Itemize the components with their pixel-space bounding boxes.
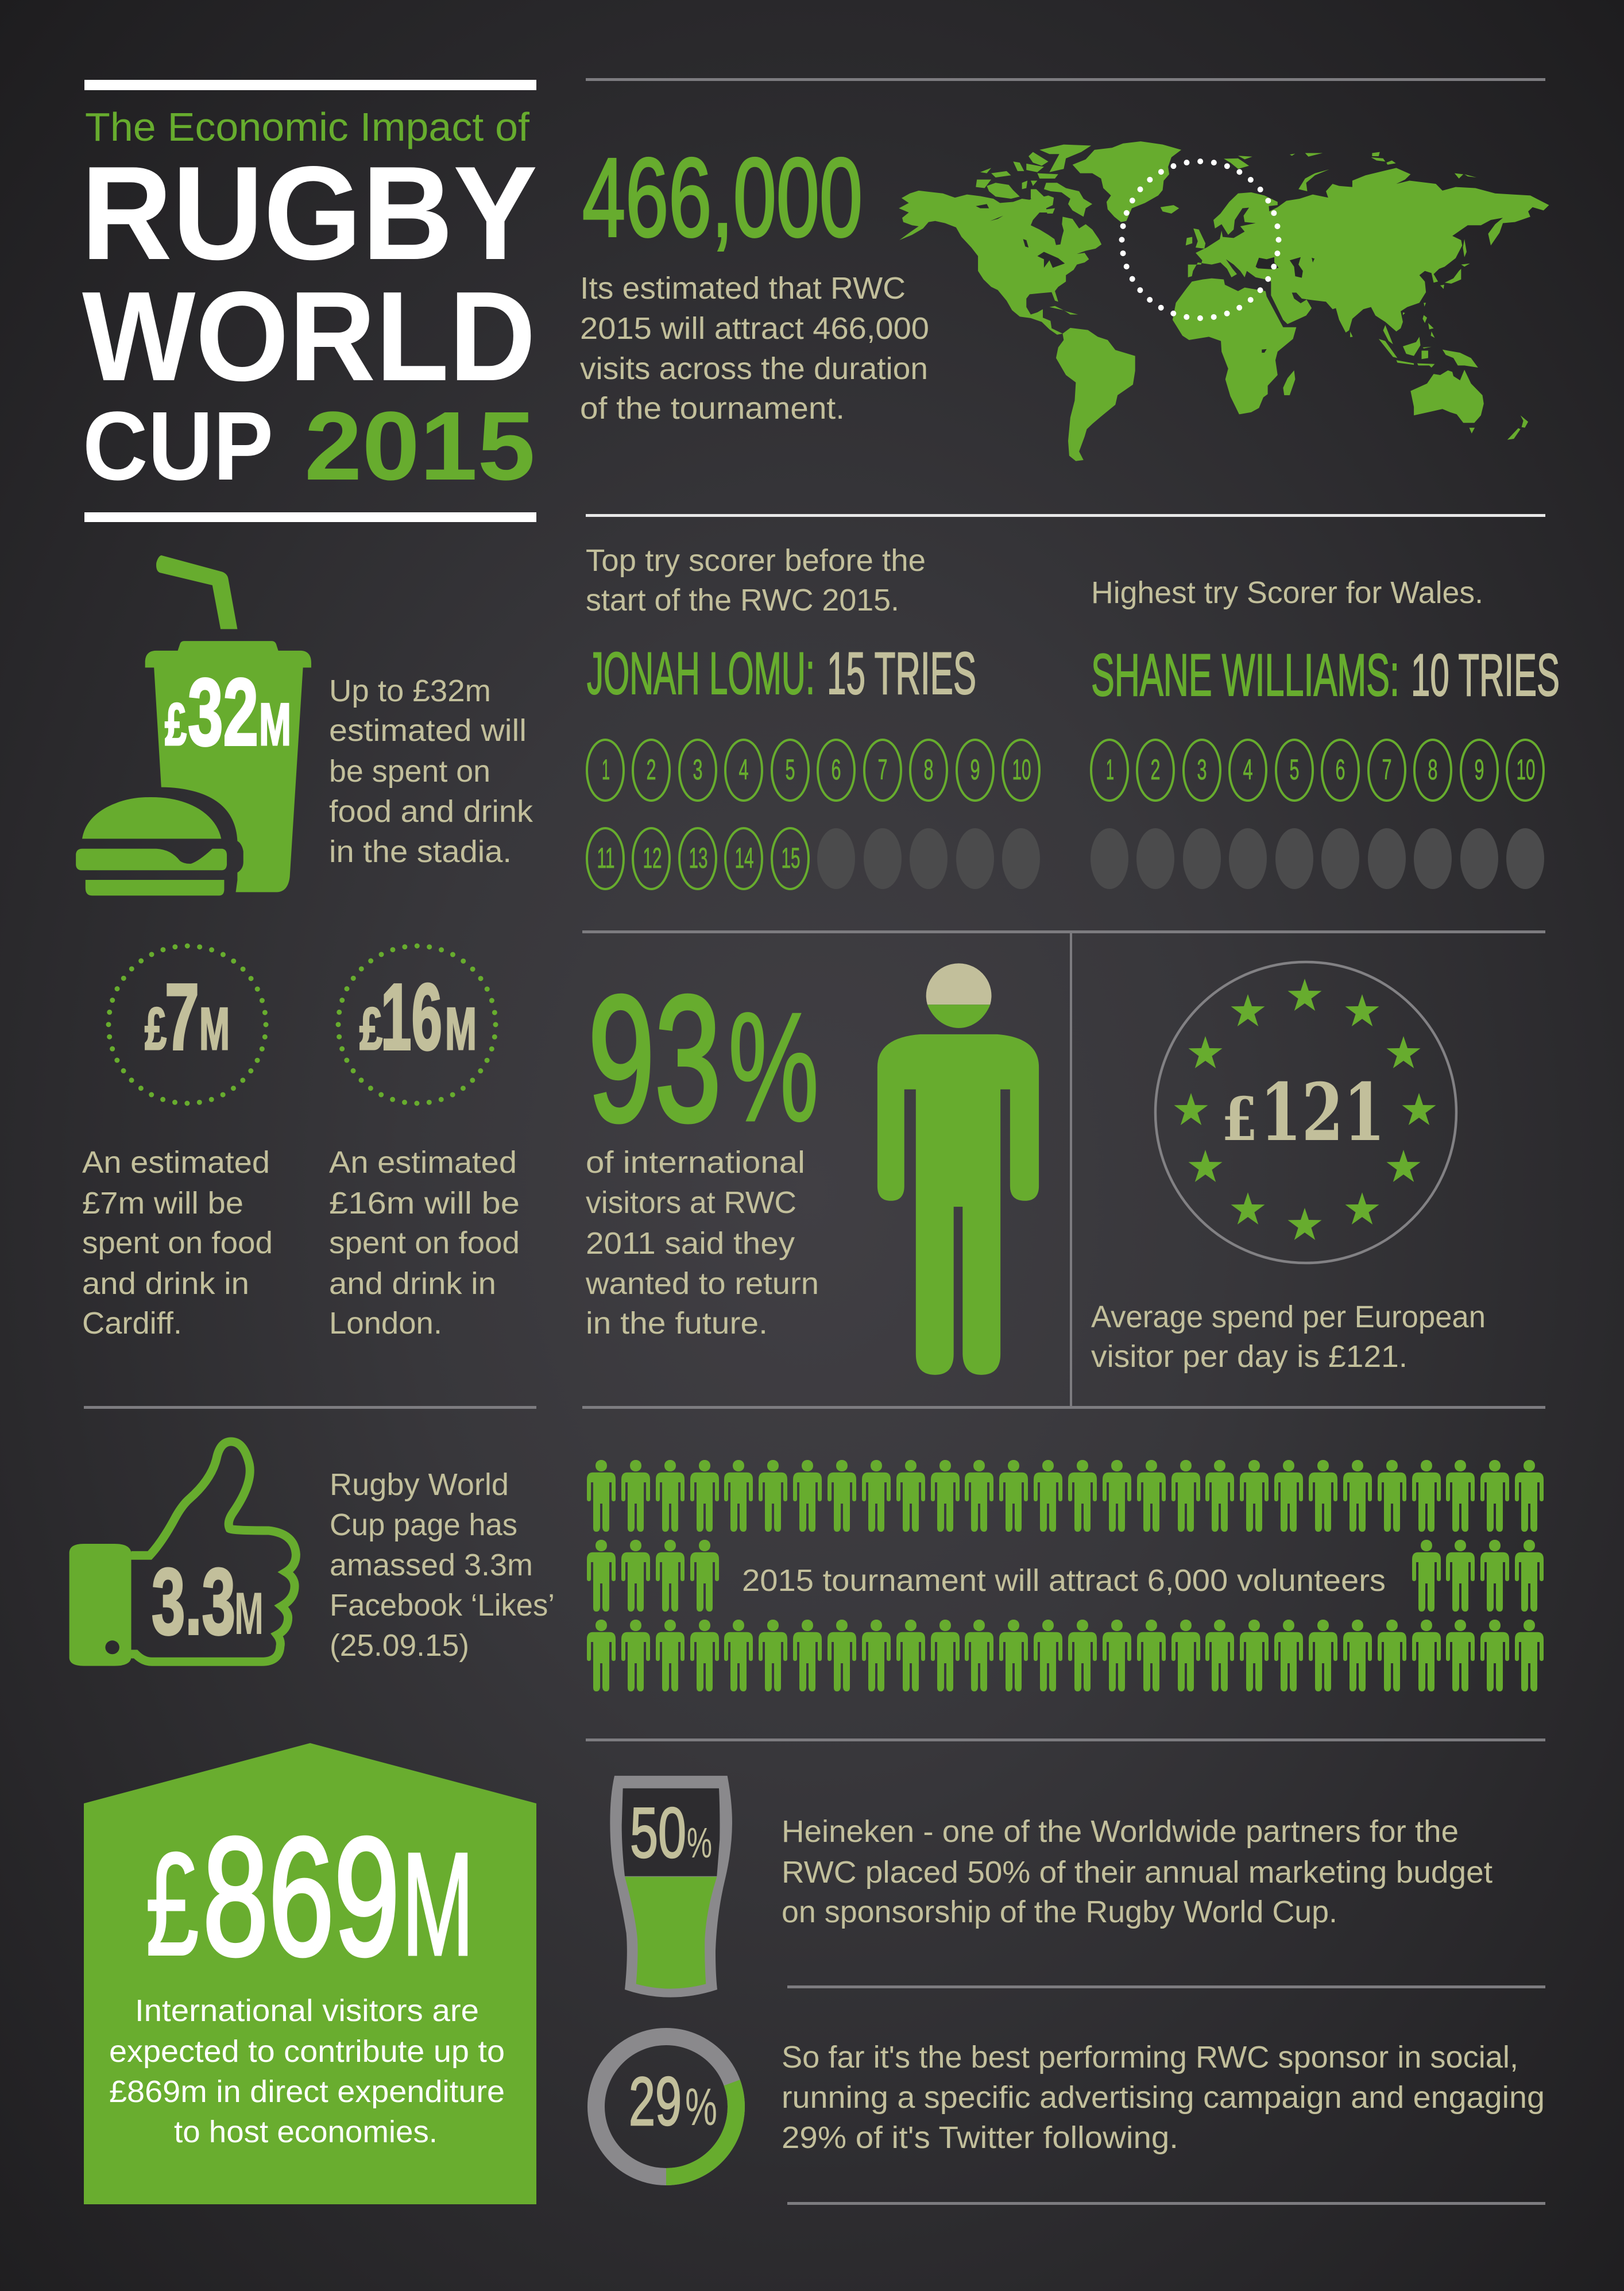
tries ovals: 8	[923, 754, 934, 786]
title: CUP: CUP	[83, 392, 273, 501]
Williams tries ovals: 7	[1382, 754, 1392, 786]
tries ovals: 5	[786, 754, 795, 786]
visits description: Its estimated that RWC	[580, 271, 906, 306]
visits description: of the tournament.	[580, 391, 845, 426]
people row 1	[587, 1460, 1544, 1532]
Williams tries ovals: 8	[1428, 754, 1438, 786]
European spend description	[1091, 1300, 1486, 1374]
house shape	[84, 1743, 536, 2204]
icon: world map	[899, 141, 1549, 461]
icon: person	[877, 963, 1039, 1375]
Cardiff description: Cardiff.	[82, 1306, 182, 1340]
title block	[81, 80, 538, 522]
panel: try scorer Shane Williams	[1091, 575, 1560, 889]
panel: Cardiff spend	[82, 946, 273, 1340]
people row 2 left	[587, 1540, 719, 1612]
amount 3.3m: M	[234, 1581, 264, 1647]
29 percent: %	[685, 2078, 717, 2137]
volunteers text: 2015 tournament will attract 6,000 volunteers	[742, 1563, 1386, 1598]
dotted circle	[109, 946, 266, 1103]
big number 93 percent: 93	[588, 959, 721, 1159]
panel: return visitors	[585, 959, 1039, 1375]
tries ovals: 3	[693, 754, 703, 786]
panel: London spend	[329, 946, 520, 1340]
amount £7m	[145, 964, 230, 1069]
amount £16m: M	[445, 996, 477, 1063]
50 percent: %	[687, 1819, 712, 1867]
social description: 29% of it's Twitter following.	[782, 2120, 1178, 2155]
Lomu intro text	[586, 543, 926, 617]
amount £869m: M	[402, 1822, 474, 1985]
15 tries: 15 TRIES	[827, 640, 976, 707]
Williams tries ovals: 1	[1106, 754, 1114, 786]
likes description: amassed 3.3m	[330, 1548, 533, 1582]
tries ovals: 15	[781, 842, 801, 874]
likes description	[330, 1467, 555, 1663]
London description: London.	[329, 1306, 442, 1340]
amount £7m: £	[145, 996, 167, 1063]
expenditure description: to host economies.	[174, 2115, 438, 2149]
amount £121	[1221, 1065, 1385, 1159]
tries ovals: 11	[597, 842, 614, 874]
title: subtitle: The Economic Impact of	[85, 105, 530, 149]
stadia description: food and drink	[329, 794, 533, 829]
rule	[787, 2202, 1545, 2205]
panel: European spend	[1091, 962, 1486, 1374]
return description: 2011 said they	[586, 1226, 795, 1261]
amount £121: 121	[1260, 1065, 1385, 1159]
tries ovals	[587, 740, 1040, 889]
Heineken description: RWC placed 50% of their annual marketing budget	[782, 1855, 1492, 1890]
tries ovals: 4	[738, 754, 749, 786]
amount £121: £	[1221, 1084, 1258, 1154]
amount 3.3m: 3.3	[152, 1549, 235, 1654]
European spend description: visitor per day is £121.	[1091, 1339, 1408, 1374]
likes description: Rugby World	[330, 1467, 509, 1502]
amount £7m: M	[199, 996, 230, 1063]
Cardiff description: £7m will be	[82, 1186, 243, 1220]
stadia description: in the stadia.	[329, 835, 512, 869]
London description: An estimated	[329, 1145, 517, 1180]
amount £32m: M	[259, 691, 291, 758]
stadia description: estimated will	[329, 713, 527, 748]
amount £32m: £	[165, 691, 187, 758]
tries ovals: 9	[970, 754, 980, 786]
name Shane Williams: SHANE WILLIAMS:	[1091, 642, 1399, 709]
50 percent: 50	[630, 1794, 686, 1873]
London description: spent on food	[329, 1226, 520, 1260]
panel: Heineken marketing	[610, 1776, 1492, 1998]
top rule	[586, 78, 1545, 81]
likes description: Facebook ‘Likes’	[330, 1588, 555, 1622]
visits description: visits across the duration	[580, 351, 928, 386]
return description: wanted to return	[585, 1266, 819, 1301]
return description	[585, 1145, 819, 1340]
visits description: 2015 will attract 466,000	[580, 311, 929, 346]
panel: volunteers	[587, 1460, 1544, 1691]
stadia description	[329, 674, 533, 869]
Williams intro text: Highest try Scorer for Wales.	[1091, 575, 1483, 610]
amount £7m: 7	[165, 964, 199, 1069]
return description: in the future.	[586, 1306, 768, 1340]
London description: £16m will be	[329, 1186, 520, 1220]
Cardiff description: spent on food	[82, 1226, 273, 1260]
stadia description: Up to £32m	[329, 674, 491, 708]
social description	[782, 2040, 1545, 2155]
Williams tries ovals: 5	[1290, 754, 1299, 786]
title: RUGBY: RUGBY	[81, 139, 538, 288]
big number 93 percent: %	[728, 981, 819, 1154]
icon: donut chart 29 percent	[596, 2037, 736, 2177]
amount £16m: 16	[381, 964, 442, 1069]
panel: Facebook likes	[69, 1442, 555, 1666]
Heineken description: Heineken - one of the Worldwide partners for the	[782, 1814, 1459, 1849]
Williams tries ovals: 6	[1336, 754, 1345, 786]
return description: visitors at RWC	[586, 1185, 796, 1220]
name Jonah Lomu: JONAH LOMU:	[587, 640, 815, 707]
icon: thumbs up	[69, 1442, 296, 1666]
social description: running a specific advertising campaign and engaging	[782, 2080, 1545, 2115]
people row 2 right	[1412, 1540, 1544, 1612]
dotted circle around Europe	[1122, 161, 1278, 318]
big number 466,000: 466,000	[582, 135, 863, 260]
tries ovals: 1	[602, 754, 610, 786]
Lomu intro text: start of the RWC 2015.	[586, 583, 899, 617]
social description: So far it's the best performing RWC sponsor in social,	[782, 2040, 1518, 2074]
Williams tries ovals: 9	[1475, 754, 1484, 786]
European spend description: Average spend per European	[1091, 1300, 1486, 1334]
amount £16m: £	[359, 996, 382, 1063]
tries ovals: 2	[647, 754, 656, 786]
likes description: Cup page has	[330, 1508, 517, 1542]
panel: try scorer Jonah Lomu	[586, 543, 1040, 889]
icon: ring of stars	[1174, 979, 1436, 1240]
amount £869m: 869	[203, 1803, 400, 1990]
panel: visits	[580, 135, 1549, 461]
tries ovals: 7	[877, 754, 888, 786]
tries ovals: 13	[689, 842, 707, 874]
rule	[787, 1985, 1545, 1988]
panel: stadia food and drink	[76, 555, 533, 895]
dotted circle	[338, 946, 496, 1103]
Heineken description	[782, 1814, 1492, 1929]
panel: social performance	[596, 2037, 1545, 2177]
return description: of international	[586, 1145, 805, 1180]
amount £869m: £	[146, 1822, 199, 1985]
expenditure description	[109, 1993, 505, 2149]
expenditure description: £869m in direct expenditure	[109, 2074, 505, 2109]
29 percent: 29	[629, 2063, 682, 2140]
Cardiff description: and drink in	[82, 1266, 249, 1301]
icon: drink cup and burger	[76, 555, 311, 895]
Lomu intro text: Top try scorer before the	[586, 543, 926, 578]
tries ovals: 6	[832, 754, 841, 786]
rule	[586, 1738, 1545, 1741]
icon: beer glass	[610, 1776, 732, 1998]
Williams tries ovals: 10	[1516, 754, 1536, 786]
circle outline	[1155, 962, 1456, 1263]
people row 3	[587, 1620, 1544, 1691]
title: 2015: 2015	[304, 392, 535, 501]
London description: and drink in	[329, 1266, 496, 1301]
likes description: (25.09.15)	[330, 1628, 469, 1663]
Williams tries ovals: 3	[1197, 754, 1207, 786]
Williams tries ovals: 2	[1151, 754, 1160, 786]
visits description	[580, 271, 929, 426]
tries ovals: 10	[1012, 754, 1031, 786]
Heineken description: on sponsorship of the Rugby World Cup.	[782, 1895, 1337, 1929]
tries ovals: 12	[643, 842, 662, 874]
Cardiff description: An estimated	[82, 1145, 270, 1180]
tries ovals: 14	[735, 842, 753, 874]
expenditure description: expected to contribute up to	[109, 2034, 505, 2069]
amount £32m: 32	[188, 659, 258, 766]
title: WORLD: WORLD	[82, 265, 536, 408]
section rules	[84, 930, 1545, 1409]
expenditure description: International visitors are	[135, 1993, 479, 2028]
stadia description: be spent on	[329, 754, 490, 789]
London description	[329, 1145, 520, 1340]
rule	[586, 514, 1545, 517]
Williams tries ovals: 4	[1243, 754, 1253, 786]
panel: international visitors expenditure	[84, 1743, 536, 2204]
Williams tries ovals	[1091, 740, 1544, 889]
Cardiff description	[82, 1145, 273, 1340]
